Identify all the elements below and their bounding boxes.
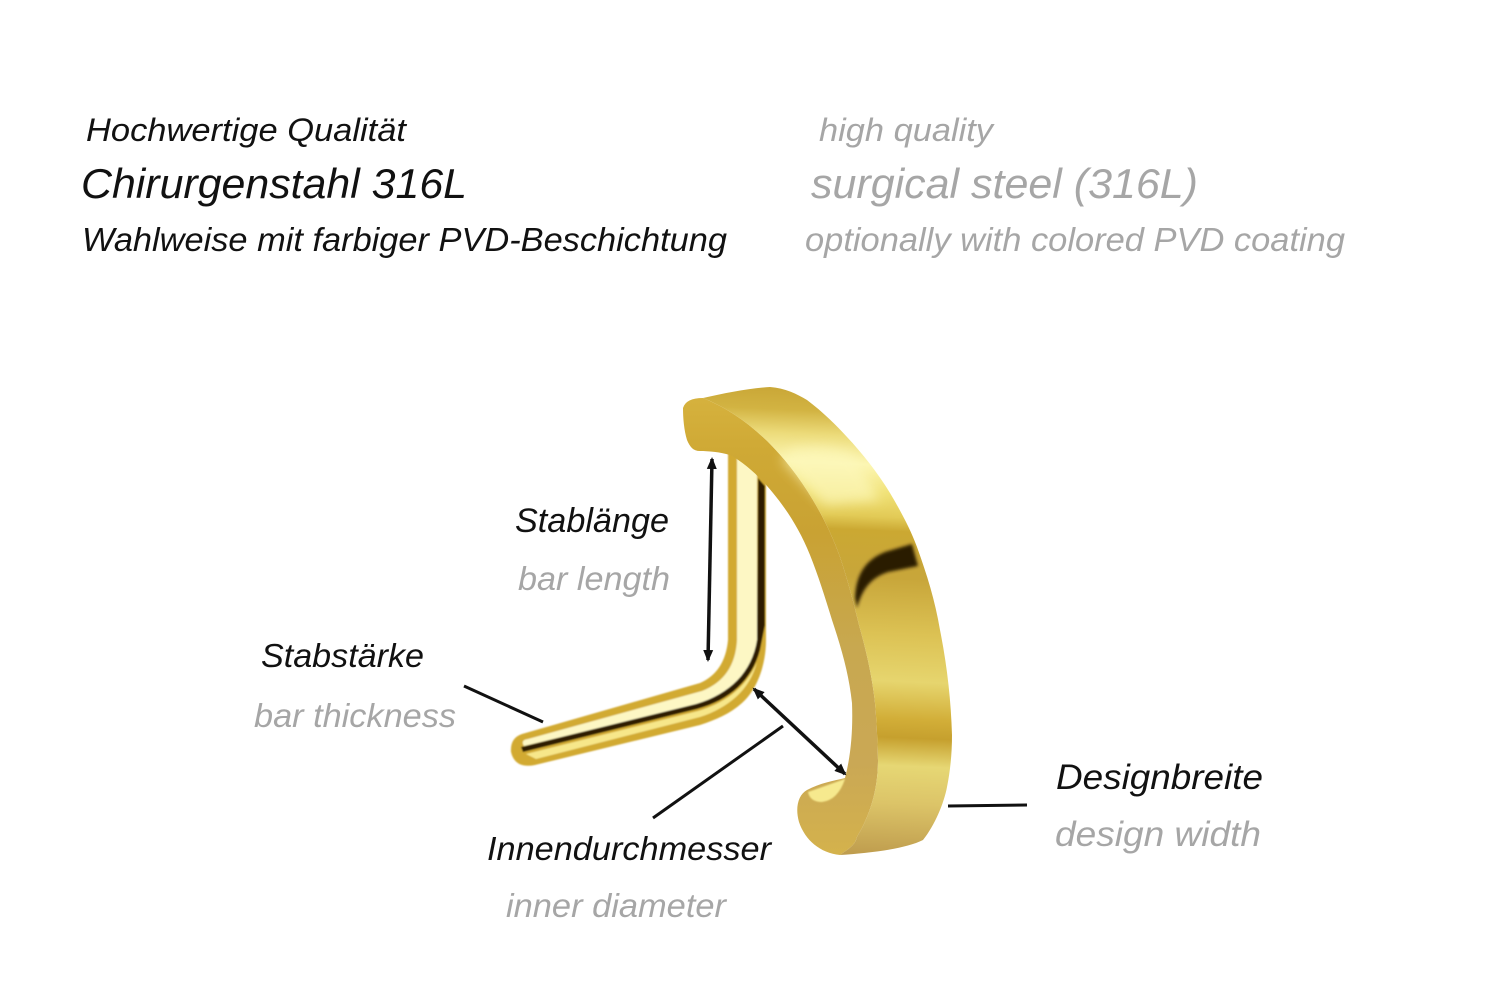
product illustration: gold curved piercing <box>511 387 952 855</box>
band: inner side surface <box>683 398 878 855</box>
label: bar thickness <box>254 637 456 734</box>
heading line: surgical steel: surgical steel (316L) <box>811 160 1198 207</box>
dimension arrow: bar length <box>708 459 712 660</box>
heading line: Hochwertige Qualität: Hochwertige Qualität <box>86 112 407 148</box>
label: bar length: Stablänge <box>515 502 669 540</box>
heading line: Chirurgenstahl 316L: Chirurgenstahl 316L <box>81 160 467 207</box>
label: design width: Designbreite <box>1056 758 1263 797</box>
label: bar thickness: Stabstärke <box>261 637 424 674</box>
label: bar thickness: bar thickness <box>254 697 456 734</box>
leader line: inner diameter <box>653 726 783 818</box>
label: design width: design width <box>1055 815 1261 854</box>
label: bar length <box>515 502 670 597</box>
label: inner diameter <box>487 830 773 924</box>
label: inner diameter: inner diameter <box>506 887 728 924</box>
leader line: design width <box>948 805 1027 806</box>
bar: vertical and bent stem with rounded tip <box>511 450 766 766</box>
dimension arrow: inner diameter <box>754 689 845 774</box>
leader line: bar thickness <box>464 686 543 722</box>
label: inner diameter: Innendurchmesser <box>487 830 773 867</box>
heading block: English <box>805 112 1346 258</box>
heading block: German <box>81 112 728 258</box>
highlight: bottom cap <box>808 779 845 802</box>
label: bar length: bar length <box>518 560 670 597</box>
highlight: bright reflection on band <box>782 447 880 505</box>
label: design width <box>1055 758 1263 854</box>
band: outer front face <box>703 387 952 855</box>
heading line: optionally: optionally with colored PVD coating <box>805 221 1346 258</box>
highlight: dark crescent reflection <box>855 544 918 608</box>
heading line: Wahlweise: Wahlweise mit farbiger PVD-Beschichtung <box>82 221 728 258</box>
heading line: high quality: high quality <box>819 112 995 148</box>
